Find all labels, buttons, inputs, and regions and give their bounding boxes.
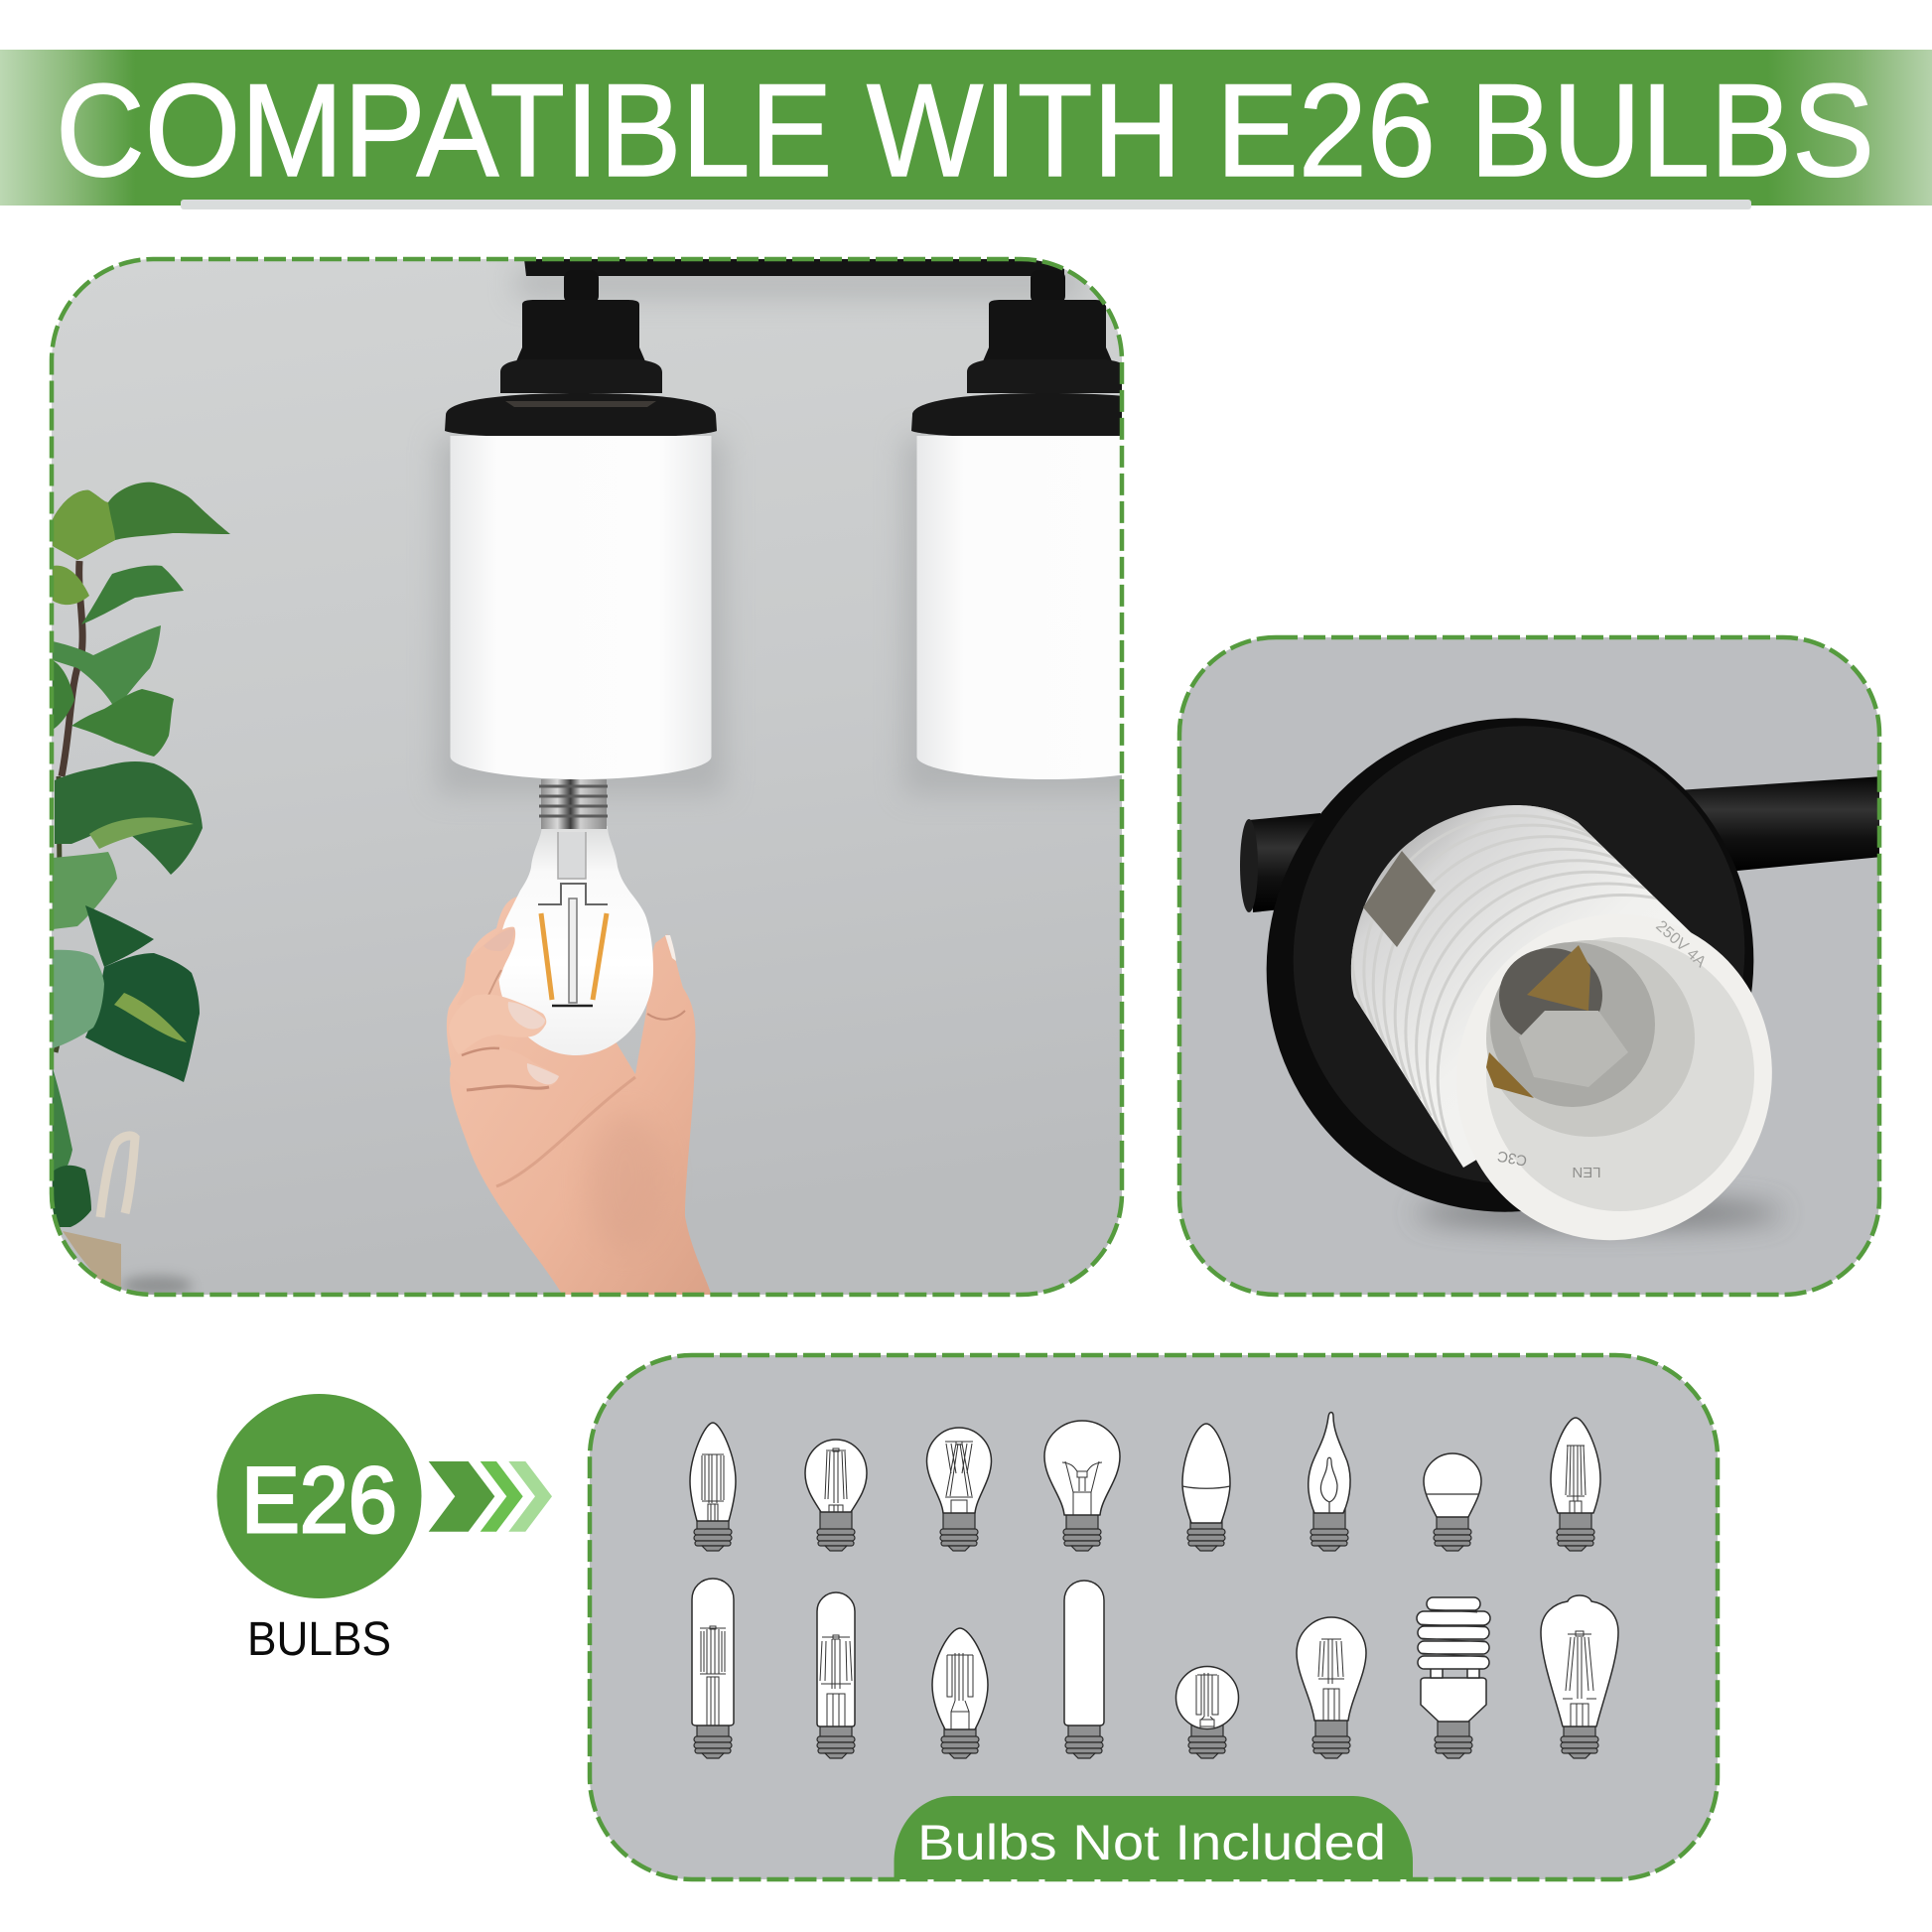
note tab: Bulbs Not Included — [917, 1815, 1386, 1870]
moulded markings: C3C — [1496, 1147, 1528, 1169]
bulb held in hand — [498, 779, 653, 1055]
lamp shadows — [437, 268, 1142, 794]
socket front rim: 250V 4A — [1652, 917, 1710, 971]
metal clip — [1363, 851, 1436, 947]
socket shadow — [1415, 1199, 1782, 1227]
icon: tall tubular filament bulb — [692, 1579, 734, 1758]
hand fingers — [450, 927, 685, 1187]
icon: ST64 Edison filament bulb — [1541, 1595, 1618, 1758]
E26 badge: E26 — [241, 1448, 397, 1552]
icon: plain frosted tube bulb — [1064, 1581, 1104, 1758]
BULBS label: BULBS — [247, 1613, 391, 1666]
note tab — [894, 1796, 1413, 1879]
socket body — [1350, 805, 1692, 1168]
socket front rim: LEN — [1572, 1164, 1601, 1180]
lamp: left fixture — [445, 259, 1064, 779]
header banner — [0, 50, 1932, 209]
icon: wide candle filament bulb — [932, 1628, 988, 1758]
basket — [63, 1136, 135, 1287]
icon: medium tubular filament bulb — [817, 1592, 855, 1758]
lamp: right fixture — [911, 274, 1122, 779]
panel: lamp photo with hand installing a bulb — [52, 259, 1183, 1296]
plant shadow — [121, 1276, 193, 1296]
icon: A-shape crossed filament bulb — [927, 1428, 991, 1551]
socket front rim — [1476, 921, 1772, 1241]
icon: mini globe filament bulb — [1175, 1666, 1239, 1758]
arrow chevrons — [429, 1461, 552, 1532]
icon: small globe LED bulb — [1424, 1453, 1481, 1551]
icon: candle filament bulb — [690, 1423, 736, 1551]
icon: classic incandescent bulb — [1044, 1421, 1120, 1551]
icon: spiral CFL bulb — [1417, 1597, 1490, 1758]
icon: frosted candle LED bulb — [1182, 1424, 1230, 1551]
panel: socket photo — [1179, 632, 1882, 1298]
hand palm — [447, 896, 712, 1296]
icon: tall candle filament bulb — [1551, 1418, 1600, 1551]
plant — [53, 483, 230, 1227]
black canopy disc — [1267, 718, 1753, 1212]
icon: flame tip bulb — [1309, 1412, 1350, 1551]
icon: A-shape filament bulb — [1297, 1617, 1366, 1758]
E26 badge — [216, 1394, 421, 1598]
panel: compatible bulb types — [590, 1355, 1718, 1879]
icon: small round filament bulb — [805, 1440, 867, 1551]
mounting bar — [1240, 776, 1882, 912]
